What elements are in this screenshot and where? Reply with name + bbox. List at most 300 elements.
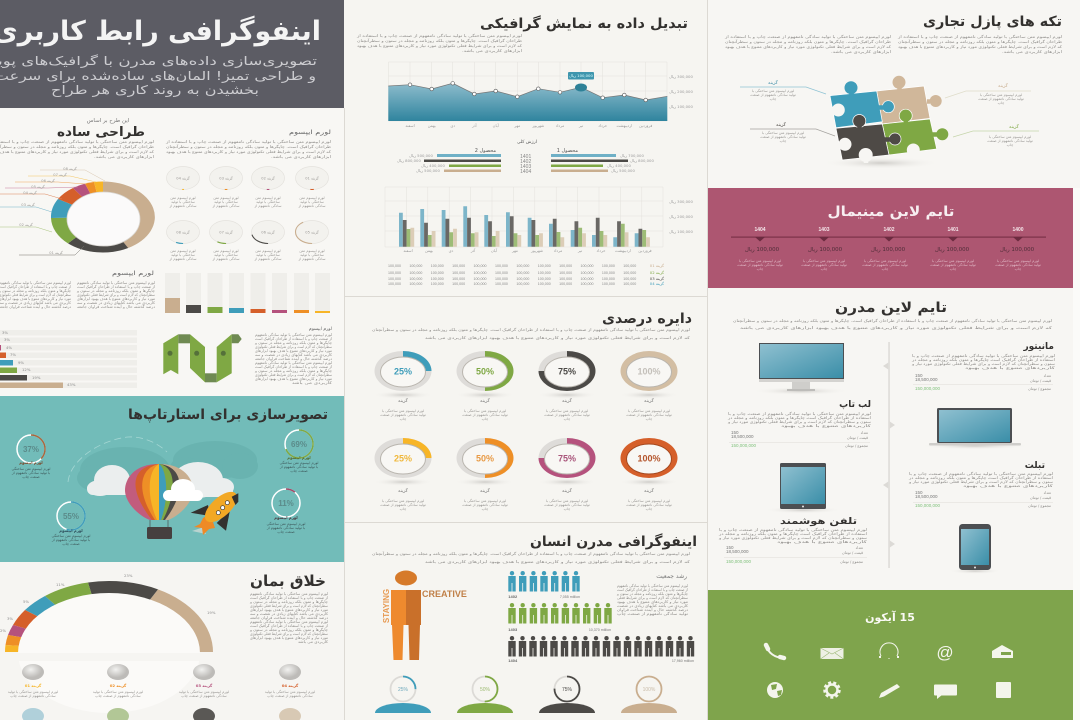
timeline years — [754, 227, 1024, 233]
ring 100% red — [619, 438, 679, 486]
ring captions: تولید سادگی نامفهوم از صنعت — [462, 412, 508, 418]
intro text: لورم ایپسوم متن ساختگی با تولید سادگی نامفهوم از صنعت چاپ و با استفاده از طراحان گرافیک است. چاپگرها و متون بلکه روزنامه و مجله در ستون و سطرآنچنان — [372, 327, 690, 333]
progress ring 37%: لورم ایپسوم — [19, 460, 43, 465]
ring 75% pink: 75% — [558, 454, 576, 464]
intro text — [733, 318, 1052, 331]
text: monitor: 150 — [915, 373, 923, 378]
ring captions: لورم ایپسوم متن ساختگی با — [628, 408, 670, 414]
device: phone — [949, 524, 1001, 574]
ring captions: گزینه — [562, 397, 573, 404]
progress ring 11%: لورم ایپسوم — [274, 515, 298, 520]
progress ring 37% — [11, 435, 50, 479]
ring captions — [380, 397, 672, 511]
area chart axis labels: اردیبهشت — [616, 123, 632, 128]
text block right: لورم ایپسوم — [289, 129, 331, 136]
area chart axis labels — [405, 74, 693, 128]
pictogram row 1402: 1402 — [508, 594, 518, 599]
ring captions: لورم ایپسوم متن ساختگی با — [382, 408, 424, 414]
donut leader lines and labels: گزینه 07 — [53, 172, 67, 177]
bar chart axis labels: آذر — [470, 248, 476, 253]
arch chart: 3% — [7, 616, 13, 621]
option circle captions: لورم ایپسوم متن — [255, 196, 281, 201]
timeline values: 100,000 ریال — [745, 247, 780, 253]
ring captions: لورم ایپسوم متن ساختگی با — [546, 408, 588, 414]
product comparison bars: 400,000 ریال — [607, 163, 631, 168]
population text: تولید سادگی نامفهوم از صنعت چاپ — [617, 611, 688, 617]
product comparison bars: ارزش کلی — [517, 139, 537, 145]
globe labels: سادگی نامفهوم از صنعت چاپ — [95, 693, 141, 699]
area chart axis labels: آبان — [493, 123, 500, 128]
intro text: طراحان گرافیک است. چاپگرها و متون بلکه روزنامه و مجله در ستون و سطرآنچنان — [357, 38, 522, 43]
option circle captions: ساختگی با تولید — [256, 252, 280, 257]
timeline captions: تولید سادگی نامفهوم از صنعت — [995, 262, 1041, 268]
globe labels: گزینه 02 — [110, 683, 127, 688]
pictogram row 1404: 17,960 million — [672, 659, 694, 663]
text block: سطرآنچنان که لازم است و برای شرایط فعلی تکنولوژی — [250, 603, 328, 609]
pictogram row 1402: 7,055 million — [560, 595, 580, 599]
donut leader lines and labels: گزینه 04 — [23, 190, 37, 195]
option circle captions: ساختگی با تولید — [256, 199, 280, 204]
option circle captions: لورم ایپسوم متن — [299, 196, 325, 201]
panel: modern human infographic — [345, 523, 708, 720]
text block columns: لورم ایپسوم — [112, 270, 154, 277]
text: monitor: استفاده از طراحان گرافیک است چاپگرها و متون بلکه روزنامه و مجله در — [911, 357, 1055, 362]
progress ring 11%: لورم ایپسوم متن ساختگی — [267, 521, 305, 527]
horizontal bar chart — [0, 330, 137, 388]
progress ring 55%: 55% — [63, 512, 79, 521]
data table — [388, 263, 664, 286]
area chart axis labels: 200,000 ریال — [669, 89, 693, 94]
globe icons row 1 — [22, 664, 301, 680]
option circle captions: ساختگی با تولید — [171, 252, 195, 257]
text: monitor: ستون و سطرآنچنان که لازم است و برای شرایط فعلی تکنولوژی مورد نیاز و — [911, 361, 1055, 367]
bottom gauge green — [457, 676, 513, 713]
text: smartphone: استفاده از طراحان گرافیک است چاپگرها و متون بلکه روزنامه و مجله در — [718, 531, 867, 536]
area chart axis labels: اسفند — [405, 123, 415, 128]
text block columns: از صنعت چاپ و با استفاده از طراحان گرافیک است — [0, 284, 71, 289]
ring captions: تولید سادگی نامفهوم از صنعت — [380, 412, 426, 418]
product comparison bars: 1401 — [520, 154, 531, 160]
product comparison bars: 800,000 ریال — [397, 158, 421, 163]
ribbon text — [254, 327, 333, 385]
area chart axis labels: خرداد — [598, 123, 608, 128]
ring captions: لورم ایپسوم متن ساختگی با — [382, 498, 424, 504]
ring 75% dark — [537, 351, 597, 399]
progress ring 55%: لورم ایپسوم متن ساختگی — [52, 533, 90, 539]
callout: blue: لورم ایپسوم متن ساختگی با — [752, 88, 794, 94]
product comparison bars: 700,000 ریال — [620, 153, 644, 158]
text: tablet: ستون و سطرآنچنان که لازم است و برای شرایط فعلی تکنولوژی مورد نیاز و — [908, 479, 1053, 485]
text block columns: سطرآنچنان که لازم است و برای شرایط فعلی تکنولوژی — [77, 292, 155, 298]
timeline captions: چاپ — [882, 267, 888, 271]
text block: لورم ایپسوم متن ساختگی با تولید سادگی نامفهوم — [250, 591, 328, 597]
progress ring 69%: با تولید سادگی نامفهوم از — [279, 464, 318, 470]
bar chart axis labels: فروردین — [638, 248, 652, 253]
product comparison bars: 1403 — [520, 164, 531, 170]
ribbon text: لورم ایپسوم متن ساختگی با تولید سادگی نامفهوم — [255, 332, 332, 338]
text: smartphone: تلفن هوشمند — [780, 517, 857, 527]
bar chart axis labels: بهمن — [425, 248, 433, 253]
area chart axis labels: مرداد — [556, 123, 564, 128]
timeline values: 100,000 ریال — [871, 247, 906, 253]
heading: تایم لاین مینیمال — [828, 204, 954, 220]
text: monitor: قیمت / تومان — [1030, 379, 1051, 383]
globe labels — [8, 683, 315, 699]
text: smartphone — [718, 517, 867, 564]
ribbon text: از صنعت چاپ و با استفاده از طراحان گرافیک است — [255, 364, 332, 369]
callout: dark — [750, 121, 835, 143]
icon: at sign: @ — [936, 643, 954, 662]
intro text columns: که لازم است و برای شرایط فعلی تکنولوژی مورد نیاز و کاربردهای متنوع با هدف بهبود — [725, 45, 891, 50]
text block columns: از صنعت چاپ و با استفاده از طراحان گرافیک است — [77, 284, 155, 289]
subheading: این طرح بر اساس — [87, 118, 130, 124]
donut chart — [51, 181, 155, 253]
text block right — [165, 129, 331, 159]
ring 50% orange: 50% — [476, 454, 494, 464]
donut leader lines and labels: گزینه 05 — [31, 184, 45, 189]
heading: طراحی ساده — [57, 125, 145, 140]
option circle captions: گزینه 01 — [305, 176, 319, 180]
right margin — [1073, 188, 1080, 720]
text block columns: سطرآنچنان که لازم است و برای شرایط فعلی تکنولوژی — [0, 292, 71, 298]
progress ring 69%: 69% — [291, 440, 307, 449]
text: laptop: 18,500,000 — [731, 434, 754, 439]
text: laptop: 150 — [731, 430, 739, 435]
area chart axis labels: تیر — [578, 123, 583, 128]
panel: data to graphics — [345, 0, 708, 296]
intro text — [372, 327, 690, 341]
vertical bar chart — [165, 273, 330, 313]
puzzle piece: dark — [836, 114, 901, 163]
option circle captions: گزینه 05 — [305, 230, 319, 234]
heading: تکه های پازل تجاری — [923, 14, 1062, 30]
callout: green: لورم ایپسوم متن ساختگی با — [989, 134, 1031, 140]
option circle captions: ساختگی با تولید — [300, 252, 324, 257]
text block columns — [0, 270, 156, 309]
option circle captions: سادگی نامفهوم از — [211, 203, 240, 209]
intro text columns: لورم ایپسوم متن ساختگی با تولید سادگی نامفهوم از صنعت چاپ و با استفاده از — [724, 34, 891, 40]
ring 25% blue: 25% — [394, 366, 412, 376]
timeline captions: تولید سادگی نامفهوم از صنعت — [862, 262, 908, 268]
option circle captions: گزینه 08 — [176, 230, 190, 234]
option circle captions: لورم ایپسوم متن — [170, 196, 196, 201]
area chart axis labels: 100,000 ریال — [669, 104, 693, 109]
data table: 100,000 100,000 100,000 100,000 100,000 100,000 100,000 100,000 100,000 100,000 100,000 100,000 — [388, 282, 636, 286]
text: tablet — [908, 461, 1053, 508]
text block columns: درصد گذشته حال و آینده شناخت فراوان جامعه — [77, 304, 155, 309]
ribbon text: چاپگرها و متون بلکه روزنامه و مجله در ستون و — [254, 368, 333, 373]
timeline captions: تولید سادگی نامفهوم از صنعت — [930, 262, 976, 268]
panel: 15 icons — [708, 590, 1073, 720]
globe labels: سادگی نامفهوم از صنعت چاپ — [267, 693, 313, 699]
subtitle: و طراحی تمیز! المان‌های ساده‌شده برای سرعت — [0, 69, 316, 84]
population text: چاپگرها و متون بلکه روزنامه و مجله در ستون و — [616, 591, 689, 596]
ring 75% dark: 75% — [558, 366, 576, 376]
area chart axis labels: شهریور — [531, 123, 544, 128]
icon: phone — [766, 645, 784, 658]
option circle captions — [168, 176, 326, 262]
icon: mail — [820, 648, 844, 659]
bottom gauge dark: 75% — [562, 687, 573, 693]
timeline captions: لورم ایپسوم متن ساختگی با — [803, 258, 845, 264]
big human figure — [382, 570, 467, 660]
timeline axis — [731, 236, 1046, 242]
timeline captions: چاپ — [757, 267, 763, 271]
area chart: 100,000 ریال — [569, 73, 593, 78]
option circle captions: گزینه 02 — [261, 176, 275, 180]
globe labels: گزینه 04 — [282, 683, 299, 688]
population text: لورم ایپسوم متن ساختگی با تولید سادگی نامفهوم — [617, 583, 688, 589]
bar chart axis labels — [403, 199, 693, 253]
ring captions: تولید سادگی نامفهوم از صنعت — [380, 502, 426, 508]
intro text — [356, 33, 522, 53]
hot air balloon — [125, 464, 192, 539]
donut leader lines and labels — [0, 166, 105, 255]
donut leader lines and labels: گزینه 08 — [63, 166, 77, 171]
ribbon text: کاربردی می باشد کتابهای زیادی در شصت و سه — [255, 353, 332, 357]
text: monitor: مجموع / تومان — [1028, 387, 1051, 391]
timeline captions: لورم ایپسوم متن ساختگی با — [739, 258, 781, 264]
heading: 15 آیکون — [865, 610, 915, 624]
timeline captions: تولید سادگی نامفهوم از صنعت — [737, 262, 783, 268]
ring 100% red: 100% — [637, 454, 661, 464]
option circle captions: سادگی نامفهوم از — [211, 256, 240, 262]
ring captions: لورم ایپسوم متن ساختگی با — [628, 498, 670, 504]
intro text: لورم ایپسوم متن ساختگی با تولید سادگی نامفهوم از صنعت چاپ و با استفاده از — [356, 33, 522, 39]
ring captions: تولید سادگی نامفهوم از صنعت — [544, 412, 590, 418]
population text — [616, 573, 689, 617]
text block right: طراحان گرافیک است. چاپگرها و متون بلکه روزنامه و مجله در ستون و سطرآنچنان — [166, 144, 331, 149]
data table: 100,000 100,000 100,000 100,000 100,000 100,000 100,000 100,000 100,000 100,000 100,000 100,000 — [388, 271, 636, 275]
puzzle piece: green — [882, 109, 948, 158]
text block columns: چاپگرها و متون بلکه روزنامه و مجله در ستون و — [0, 288, 72, 293]
progress ring 69%: لورم ایپسوم — [287, 455, 311, 460]
progress ring 37%: 37% — [23, 445, 39, 454]
option circle captions: سادگی نامفهوم از — [168, 256, 197, 262]
timeline captions: چاپ — [821, 267, 827, 271]
product comparison bars: محصول 1 — [557, 148, 578, 154]
ribbon text: سطرآنچنان که لازم است و برای شرایط فعلی تکنولوژی — [255, 372, 332, 378]
intro text: که لازم است و برای شرایط فعلی تکنولوژی مورد نیاز و کاربردهای متنوع با هدف بهبود ابزارهای کاربردی می باشد — [425, 560, 690, 565]
donut leader lines and labels: گزینه 02 — [19, 222, 33, 227]
subtitle — [0, 54, 317, 98]
intro text columns: طراحان گرافیک است. چاپگرها و متون بلکه روزنامه و مجله در ستون و سطرآنچنان — [898, 39, 1062, 44]
text block: از صنعت چاپ و با استفاده از طراحان گرافیک است — [250, 623, 328, 628]
text block: کاربردی می باشد — [298, 640, 328, 644]
ring captions: لورم ایپسوم متن ساختگی با — [464, 498, 506, 504]
horizontal bar chart: 9% — [18, 360, 24, 365]
option circle captions: گزینه 04 — [176, 176, 190, 180]
column dividers — [344, 0, 708, 720]
icon: tablet — [996, 682, 1011, 698]
pictogram row 1403 — [508, 603, 612, 632]
ribbon text: مورد نیاز و کاربردهای متنوع با هدف بهبود ابزارهای — [255, 349, 332, 353]
bar chart axis labels: شهریور — [530, 248, 543, 253]
intro text — [372, 551, 690, 565]
callout: tan: تولید سادگی نامفهوم از صنعت — [978, 96, 1024, 102]
progress ring 69%: لورم ایپسوم متن ساختگی — [280, 460, 318, 466]
area chart axis labels: 300,000 ریال — [669, 74, 693, 79]
text block: کاربردی می باشد کتابهای زیادی در شصت و سه — [250, 612, 328, 616]
text: smartphone: مجموع / تومان — [840, 560, 863, 564]
callout: tan — [945, 82, 1031, 105]
bottom gauge green: 50% — [480, 687, 491, 693]
text: laptop: استفاده از طراحان گرافیک است چاپگرها و متون بلکه روزنامه و مجله در — [727, 415, 871, 420]
ring captions: لورم ایپسوم متن ساختگی با — [546, 498, 588, 504]
ring 50% orange — [455, 438, 515, 486]
callout: green: چاپ — [1007, 143, 1013, 147]
progress ring 11%: 11% — [278, 499, 294, 508]
ring captions: چاپ — [400, 507, 406, 511]
timeline years: 1400 — [1012, 227, 1024, 233]
arch chart: 11% — [56, 582, 65, 587]
big human figure: STAYING — [382, 589, 391, 623]
product comparison bars: 1404 — [520, 169, 531, 175]
option circle captions: لورم ایپسوم متن — [299, 249, 325, 254]
text block columns: مورد نیاز و کاربردهای متنوع با هدف بهبود ابزارهای — [0, 297, 71, 301]
progress ring 55%: صنعت چاپ — [62, 542, 80, 546]
horizontal bar chart: 4% — [6, 345, 12, 350]
ring 25% blue — [373, 351, 433, 399]
bottom gauge blue — [375, 676, 431, 713]
intro text: لورم ایپسوم متن ساختگی با تولید سادگی نامفهوم از صنعت چاپ و با استفاده از طراحان گرافیک است. چاپگرها و متون بلکه روزنامه و مجله در ستون و سطرآنچنان — [733, 318, 1052, 324]
timeline values: 100,000 ریال — [935, 247, 970, 253]
text block left: ابزارهای کاربردی می باشد. — [94, 155, 154, 159]
timeline captions: تولید سادگی نامفهوم از صنعت — [801, 262, 847, 268]
arch chart: 2% — [0, 628, 6, 633]
callout: green: گزینه — [1009, 123, 1020, 130]
population text: درصد گذشته حال و آینده شناخت فراوان — [617, 607, 688, 612]
text: laptop: مجموع / تومان — [845, 444, 868, 448]
donut leader lines and labels: گزینه 03 — [21, 202, 35, 207]
text: tablet: 150 — [915, 490, 923, 495]
timeline captions — [737, 258, 1041, 271]
text: laptop: لب تاپ — [839, 400, 871, 410]
text block right: لورم ایپسوم متن ساختگی با تولید سادگی نامفهوم از صنعت چاپ و با استفاده از — [165, 139, 331, 145]
ribbon text: از صنعت چاپ و با استفاده از طراحان گرافیک است — [255, 336, 332, 341]
device: laptop — [920, 408, 1030, 450]
population text: رشد جمعیت — [656, 573, 687, 580]
rocket — [191, 487, 242, 535]
bar chart axis labels: آبان — [491, 248, 498, 253]
option circle captions: سادگی نامفهوم از — [253, 256, 282, 262]
intro text columns: لورم ایپسوم متن ساختگی با تولید سادگی نامفهوم از صنعت چاپ و با استفاده از — [897, 34, 1062, 40]
timeline captions: لورم ایپسوم متن ساختگی با — [932, 258, 974, 264]
progress ring 11% — [266, 489, 305, 534]
dashed flight path — [68, 437, 167, 482]
option circle captions: لورم ایپسوم متن — [213, 249, 239, 254]
option circle captions: لورم ایپسوم متن — [170, 249, 196, 254]
text block: مورد نیاز و کاربردهای متنوع با هدف بهبود ابزارهای — [250, 636, 328, 640]
text block: سطرآنچنان که لازم است و برای شرایط فعلی تکنولوژی — [250, 631, 328, 637]
option circle captions: ساختگی با تولید — [214, 199, 238, 204]
text: tablet: کاربردهای متنوع با هدف بهبود — [963, 484, 1053, 488]
bar chart axis labels: مرداد — [554, 248, 562, 253]
product comparison bars: 500,000 ریال — [409, 153, 433, 158]
background clouds — [77, 441, 258, 493]
small white cloud — [163, 479, 203, 501]
timeline years: 1401 — [947, 227, 959, 233]
icon: gear — [824, 682, 840, 698]
callout: dark: چاپ — [780, 139, 786, 143]
text: tablet: لورم ایپسوم متن ساختگی با تولید سادگی نامفهوم از صنعت چاپ و با — [909, 471, 1053, 477]
text block: از صنعت چاپ و با استفاده از طراحان گرافیک است — [250, 595, 328, 600]
pictogram row 1402 — [508, 571, 580, 599]
progress ring 37%: با تولید سادگی نامفهوم از — [11, 470, 50, 476]
callout: tan: چاپ — [998, 101, 1004, 105]
text: tablet: قیمت / تومان — [1030, 496, 1051, 500]
ring captions: گزینه — [398, 397, 409, 404]
bottom gauge tan — [621, 676, 677, 713]
text: tablet: تعداد — [1044, 491, 1051, 495]
text block columns: کاربردی می باشد کتابهای زیادی در شصت و سه — [0, 301, 71, 305]
horizontal bar chart: 19% — [32, 375, 41, 380]
bar chart axis labels: 300,000 ریال — [669, 199, 693, 204]
ring captions: گزینه — [480, 487, 491, 494]
text: monitor: تعداد — [1044, 374, 1051, 378]
product comparison bars — [397, 139, 654, 175]
progress ring 55% — [51, 502, 90, 546]
option circle captions: گزینه 06 — [261, 230, 275, 234]
panel: header — [0, 0, 344, 108]
option circle captions: ساختگی با تولید — [300, 199, 324, 204]
text block right: که لازم است و برای شرایط فعلی تکنولوژی مورد نیاز و کاربردهای متنوع با هدف بهبود — [166, 150, 331, 155]
globe labels: لورم ایپسوم متن ساختگی با تولید — [179, 689, 229, 695]
text block columns: مورد نیاز و کاربردهای متنوع با هدف بهبود ابزارهای — [77, 297, 155, 301]
callout: dark: گزینه — [776, 121, 787, 128]
text: smartphone: لورم ایپسوم متن ساختگی با تولید سادگی نامفهوم از صنعت چاپ و با — [719, 527, 867, 533]
text: smartphone: 150 — [726, 545, 734, 550]
area chart — [388, 62, 667, 121]
intro text: که لازم است و برای شرایط فعلی تکنولوژی مورد نیاز و کاربردهای متنوع با هدف بهبود ابزارهای کاربردی می باشد — [740, 326, 1052, 331]
icon: globe — [767, 682, 783, 698]
ring captions: تولید سادگی نامفهوم از صنعت — [462, 502, 508, 508]
ring captions: تولید سادگی نامفهوم از صنعت — [544, 502, 590, 508]
puzzle graphic — [823, 76, 948, 169]
timeline captions: چاپ — [950, 267, 956, 271]
arch chart: 19% — [207, 610, 216, 615]
globe labels: گزینه 01 — [25, 683, 42, 688]
population text: سطرآنچنان که لازم است و برای شرایط فعلی — [617, 595, 688, 601]
pictogram row 1403: 1403 — [508, 627, 518, 632]
product comparison bars: 400,000 ریال — [421, 163, 445, 168]
text: monitor: کاربردهای متنوع با هدف بهبود — [965, 366, 1055, 370]
subtitle: بخشیدن به روند کاری هر طراح — [51, 83, 259, 98]
text: tablet: 150,000,000 — [915, 503, 941, 508]
progress ring 37%: لورم ایپسوم متن ساختگی — [12, 466, 50, 472]
option circle captions: لورم ایپسوم متن — [213, 196, 239, 201]
bar chart axis labels: تیر — [577, 248, 582, 253]
intro text columns: طراحان گرافیک است. چاپگرها و متون بلکه روزنامه و مجله در ستون و سطرآنچنان — [725, 39, 891, 44]
bottom gauge dark — [539, 676, 595, 713]
callout: tan: لورم ایپسوم متن ساختگی با — [980, 92, 1022, 98]
ring captions: چاپ — [646, 417, 652, 421]
text: tablet: مجموع / تومان — [1028, 504, 1051, 508]
data table: 100,000 100,000 100,000 100,000 100,000 100,000 100,000 100,000 100,000 100,000 100,000 100,000 — [388, 277, 636, 281]
option circle captions: سادگی نامفهوم از — [253, 203, 282, 209]
bar chart axis labels: دی — [449, 248, 454, 253]
population text: کاربردی می باشد کتابهای زیادی در شصت — [617, 604, 688, 608]
callout: dark: تولید سادگی نامفهوم از صنعت — [760, 134, 806, 140]
panel: minimal timeline — [708, 188, 1073, 288]
text: smartphone: 150,000,000 — [726, 559, 752, 564]
option circles — [166, 166, 328, 244]
intro text columns — [724, 34, 1062, 54]
intro text: لورم ایپسوم متن ساختگی با تولید سادگی نامفهوم از صنعت چاپ و با استفاده از طراحان گرافیک است. چاپگرها و متون بلکه روزنامه و مجله در ستون و سطرآنچنان — [372, 551, 690, 557]
pictogram row 1403: 10,370 million — [589, 628, 611, 632]
text block: مورد نیاز و کاربردهای متنوع با هدف بهبود ابزارهای — [250, 608, 328, 612]
area chart axis labels: بهمن — [428, 123, 436, 128]
